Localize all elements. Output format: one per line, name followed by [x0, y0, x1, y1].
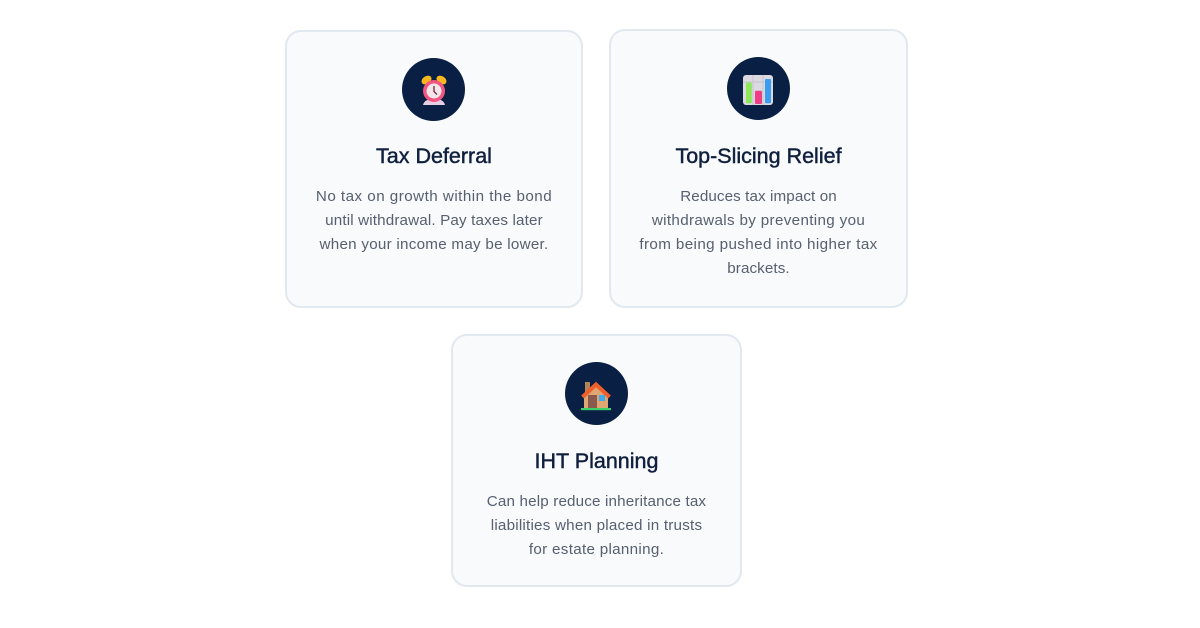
text: Tax Deferral description — [316, 188, 552, 253]
text: Top-Slicing Relief description — [639, 188, 878, 277]
icon: house — [565, 362, 628, 425]
text: Top-Slicing Relief description: Reduces tax impact on — [680, 188, 837, 205]
panel: IHT Planning — [451, 334, 742, 587]
text: IHT Planning description: for estate planning. — [529, 540, 664, 558]
text: Tax Deferral description: when your income may be lower. — [320, 236, 548, 253]
text: Top-Slicing Relief description: from being pushed into higher tax — [639, 236, 878, 253]
heading: Top-Slicing Relief: Top-Slicing Relief — [675, 144, 842, 168]
text: Tax Deferral description: until withdrawal. Pay taxes later — [325, 212, 543, 229]
text: IHT Planning description — [487, 492, 706, 558]
heading: IHT Planning: IHT Planning — [535, 449, 658, 473]
text: Top-Slicing Relief description: brackets. — [727, 260, 790, 277]
text: IHT Planning description: liabilities when placed in trusts — [491, 516, 702, 534]
panel: Top-Slicing Relief — [609, 29, 908, 308]
text: IHT Planning description: Can help reduce inheritance tax — [487, 492, 706, 510]
heading: Tax Deferral: Tax Deferral — [376, 144, 492, 168]
icon: bar chart — [727, 57, 790, 120]
panel: Tax Deferral — [285, 30, 583, 308]
text: Tax Deferral description: No tax on growth within the bond — [316, 188, 552, 205]
text: Top-Slicing Relief description: withdrawals by preventing you — [652, 212, 865, 229]
icon: alarm clock — [402, 58, 465, 121]
